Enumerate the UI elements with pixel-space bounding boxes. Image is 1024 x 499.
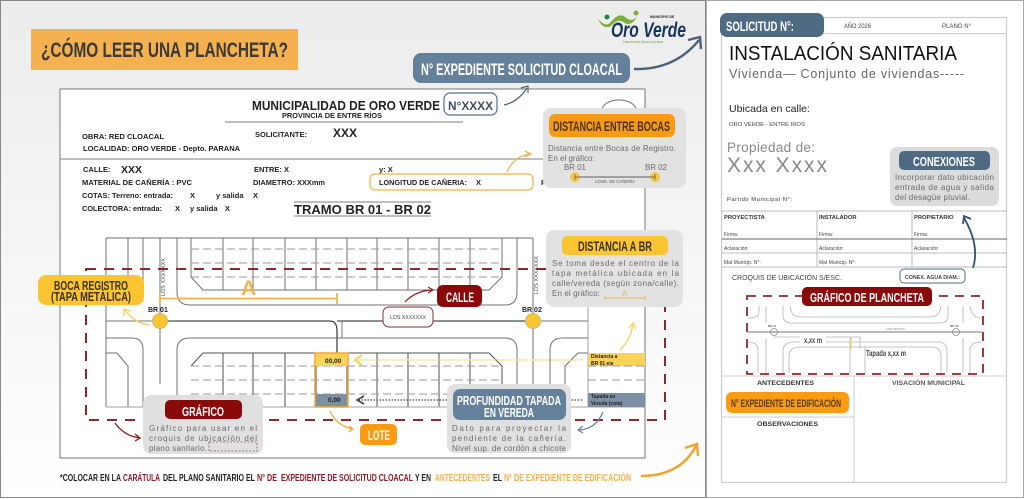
signature table: Mat Municip. N°: <box>819 260 856 266</box>
mini street plan: x,xx m <box>804 335 822 345</box>
panel: plancheta form <box>60 89 645 458</box>
vertical street labels <box>161 255 540 296</box>
form fields: P <box>541 178 546 187</box>
red dashed frame <box>86 269 665 420</box>
logo: Oro Verde: Oro Verde <box>611 19 686 42</box>
pill: expediente solicitud cloacal <box>413 53 630 83</box>
arrow: to antecedentes <box>641 444 698 476</box>
arrow: box to lote <box>330 411 353 432</box>
pill: gráfico de plancheta: GRÁFICO DE PLANCHETA <box>810 290 924 305</box>
sheet location and owner: Ubicada en calle: <box>729 103 810 115</box>
callout: lote: LOTE <box>368 428 390 443</box>
lote box: 0,00 <box>328 397 341 404</box>
panel: conexiones: Incorporar dato ubicación <box>895 173 994 182</box>
panel: distancia a BR: A <box>622 289 628 298</box>
footnote: CARÁTULA <box>123 471 160 484</box>
form fields: XXX <box>333 126 357 140</box>
form fields: X <box>190 191 195 200</box>
panel: profundidad tapada: pendiente de la cañería. <box>452 434 566 443</box>
title: ¿CÓMO LEER UNA PLANCHETA? <box>41 38 288 62</box>
sheet heading: Vivienda— Conjunto de viviendas----- <box>729 67 964 81</box>
highlight: longitud de cañeria <box>370 174 533 190</box>
lower table: VISACIÓN MUNICIPAL <box>892 378 965 387</box>
callout: boca registro: (TAPA METÁLICA) <box>51 289 131 304</box>
sheet heading <box>729 42 964 81</box>
lower table: OBSERVACIONES <box>757 421 818 428</box>
callout: calle <box>437 285 482 307</box>
form fields: LONGITUD DE CAÑERIA: <box>379 178 467 187</box>
footnote: N° DE <box>257 472 277 484</box>
lower table: ANTECEDENTES <box>757 380 814 387</box>
panel: distancia a BR: calle/vereda (según zona/calle). <box>552 279 679 288</box>
arrow: yellow dotted level <box>355 355 582 365</box>
vertical street labels: LOS XXXXXXX <box>161 257 167 296</box>
footnote: EXPEDIENTE DE SOLICITUD CLOACAL <box>281 472 413 484</box>
form fields: OBRA: RED CLOACAL <box>82 132 164 141</box>
lower table <box>722 376 1007 482</box>
form header: MUNICIPALIDAD DE ORO VERDE <box>252 98 440 113</box>
panel: profundidad tapada: PROFUNDIDAD TAPADA <box>457 393 561 408</box>
mini street plan <box>748 306 982 373</box>
diagram: long. de cañeria <box>570 172 660 184</box>
section heading: tramo: TRAMO BR 01 - BR 02 <box>294 202 431 217</box>
footnote: N° DE EXPEDIENTE DE EDIFICACIÓN <box>504 471 631 484</box>
form fields: X <box>253 191 258 200</box>
panel: right title sheet background <box>706 0 1024 498</box>
lote box: 00,00 <box>325 358 342 365</box>
label: right strips <box>588 353 645 407</box>
sheet location and owner: Partido Municipal N°: <box>727 197 792 203</box>
diagram: long. de cañeria: LONG. DE CAÑERÍA <box>595 179 635 184</box>
panel: gráfico: croquis de ubicación del <box>149 434 257 443</box>
label: right strips: BR 01 eje <box>591 361 614 367</box>
panel: gráfico: Gráfico para usar en el <box>149 424 257 433</box>
callout: lote <box>360 424 397 445</box>
form fields: COTAS: Terreno: entrada: <box>82 191 173 200</box>
signature table: Mat Municip. N°: <box>724 260 761 266</box>
panel: conexiones: entrada de agua y salida <box>895 183 995 192</box>
sheet header <box>720 13 972 37</box>
logo: Oro Verde: Hacemos futuro juntos <box>623 39 663 44</box>
panel: gráfico <box>143 395 263 454</box>
vertical street labels: LOS XXXXXXX <box>534 255 540 294</box>
form header <box>60 98 645 159</box>
arrow: distancia <box>620 323 636 350</box>
arrow: expediente <box>504 86 528 105</box>
form fields: ENTRE: X <box>254 165 289 174</box>
marker: BR 02: BR 02 <box>522 307 542 314</box>
pill: expediente de edificación: N° EXPEDIENTE DE EDIFICACIÓN <box>731 397 841 410</box>
form fields: XXX <box>121 164 142 176</box>
arrow: to solicitud <box>634 37 701 69</box>
sheet location and owner: ORO VERDE - ENTRE RIOS <box>729 122 805 128</box>
map: street plan <box>106 238 645 407</box>
form fields: y: X <box>379 165 393 174</box>
arrow: conex to conexiones <box>963 216 975 268</box>
callout: calle: CALLE <box>446 289 474 305</box>
box: N°XXXX: N°XXXX <box>448 101 493 113</box>
panel: distancia entre bocas: BR 01 <box>564 163 587 172</box>
signature table: Firma: <box>914 232 928 238</box>
signature table: Firma: <box>724 232 738 238</box>
mini street plan: Tapada x,xx m <box>866 348 906 358</box>
panel: distancia entre bocas: En el gráfico: <box>548 154 595 163</box>
sheet heading: INSTALACIÓN SANITARIA <box>729 42 958 65</box>
label: right strips: Tapada en <box>591 394 615 400</box>
footnote <box>60 471 631 484</box>
lote box <box>315 353 348 407</box>
panel: gráfico: plano sanitario. <box>149 444 207 453</box>
footnote: DEL PLANO SANITARIO EL <box>163 472 255 484</box>
form fields: X <box>225 204 230 213</box>
panel: conexiones <box>890 147 999 206</box>
form fields: SOLICITANTE: <box>255 130 307 139</box>
distance marker A <box>160 277 337 304</box>
panel: distancia a BR: tapa metálica ubicada en la <box>552 269 680 278</box>
form fields: y salida <box>216 191 244 200</box>
form header: PROVINCIA DE ENTRE RÍOS <box>282 111 382 120</box>
logo: Oro Verde <box>598 10 686 44</box>
form fields: COLECTORA: entrada: <box>82 204 162 213</box>
footnote: *COLOCAR EN LA <box>60 472 121 484</box>
mini street plan: LOS XXXXXX <box>886 327 905 331</box>
panel: title sheet <box>720 13 1007 482</box>
signature table: Aclaración: <box>724 246 749 252</box>
sheet location and owner: Propiedad de: <box>727 140 815 155</box>
box: conex agua <box>900 269 965 283</box>
form fields: MATERIAL DE CAÑERÍA : PVC <box>82 178 193 187</box>
arrow: frame to gráfico <box>115 423 140 441</box>
label: right strips: Vereda (cota) <box>591 401 623 407</box>
box: conex agua: CONEX. AGUA DIAM.: <box>905 275 960 281</box>
pill: expediente de edificación <box>726 392 849 413</box>
sheet header: SOLICITUD N°: <box>726 19 794 34</box>
panel: distancia a BR <box>546 230 683 307</box>
panel: profundidad tapada: Nivel sup. de cordón a chicote <box>452 444 567 453</box>
panel: profundidad tapada: Dato para proyectar la <box>452 424 567 433</box>
form fields: y salida <box>190 204 218 213</box>
panel: profundidad tapada <box>447 384 571 453</box>
panel: conexiones: del desagüe pluvial. <box>895 193 970 202</box>
arrow: BR 01 to boca registro <box>124 309 150 325</box>
distance marker A: A <box>241 277 256 300</box>
panel: profundidad tapada: EN VEREDA <box>484 405 534 420</box>
panel: distancia entre bocas: DISTANCIA ENTRE BOCAS <box>553 118 670 134</box>
footnote: EL <box>493 472 502 484</box>
sheet location and owner <box>727 103 828 203</box>
callout: boca registro: BOCA REGISTRO <box>54 279 128 293</box>
form fields: DIAMETRO: XXXmm <box>253 178 325 187</box>
street name box <box>383 307 433 327</box>
marker: BR 01 <box>148 307 168 328</box>
signature table: Aclaración: <box>914 246 939 252</box>
footnote: ANTECEDENTES <box>435 472 490 484</box>
marker: BR 01: BR 01 <box>148 307 168 314</box>
form fields: X <box>175 204 180 213</box>
pill: expediente solicitud cloacal: N° EXPEDIENTE SOLICITUD CLOACAL <box>421 60 622 79</box>
croquis heading: CROQUIS DE UBICACIÓN S/ESC. <box>732 273 842 282</box>
arrow: street to calle <box>405 287 433 302</box>
arrow: dark dotted level <box>357 396 582 404</box>
mini street plan: BR 01 <box>768 324 777 328</box>
arrow: longitud to distancia <box>507 151 531 172</box>
panel: gráfico: GRÁFICO <box>182 404 224 419</box>
logo: Oro Verde: MUNICIPIO DE <box>650 15 675 19</box>
label: right strips: Distancia a <box>591 354 618 360</box>
signature table <box>722 211 1007 267</box>
callout: boca registro <box>38 275 144 305</box>
panel: distancia a BR: En el gráfico: <box>552 289 600 298</box>
panel: distancia entre bocas <box>543 108 686 188</box>
panel: distancia a BR: Se toma desde el centro de la <box>552 259 680 268</box>
sheet location and owner: Xxx Xxxx <box>727 154 828 177</box>
signature table: INSTALADOR <box>819 215 857 221</box>
signature table: Firma: <box>819 232 833 238</box>
mini street plan: BR 02 <box>950 324 959 328</box>
title <box>31 29 298 70</box>
signature table: PROPIETARIO <box>914 215 954 221</box>
form fields <box>82 126 546 213</box>
form fields: LOCALIDAD: ORO VERDE - Depto. PARANA <box>83 144 241 153</box>
sheet header: PLANO N° <box>942 24 972 30</box>
signature table: Aclaración: <box>819 246 844 252</box>
sheet header: AÑO 2026 <box>844 23 872 30</box>
panel: distancia a BR: DISTANCIA A BR <box>578 239 652 254</box>
form fields: X <box>476 178 481 187</box>
panel: distancia entre bocas: BR 02 <box>645 163 668 172</box>
red dashed frame mini <box>747 296 983 374</box>
street name box: LOS XXXXXXX <box>390 315 426 321</box>
form fields: CALLE: <box>83 165 110 174</box>
panel: left explanation background <box>0 0 706 498</box>
arrow: tapada <box>578 412 603 433</box>
marker: BR 02 <box>522 307 542 328</box>
signature table: PROYECTISTA <box>724 215 766 221</box>
pill: gráfico de plancheta <box>802 287 932 306</box>
panel: conexiones: CONEXIONES <box>913 154 975 169</box>
footnote: Y EN <box>415 472 431 484</box>
panel: distancia entre bocas: Distancia entre Bocas de Registro. <box>548 144 676 153</box>
box: N°XXXX <box>444 93 497 115</box>
